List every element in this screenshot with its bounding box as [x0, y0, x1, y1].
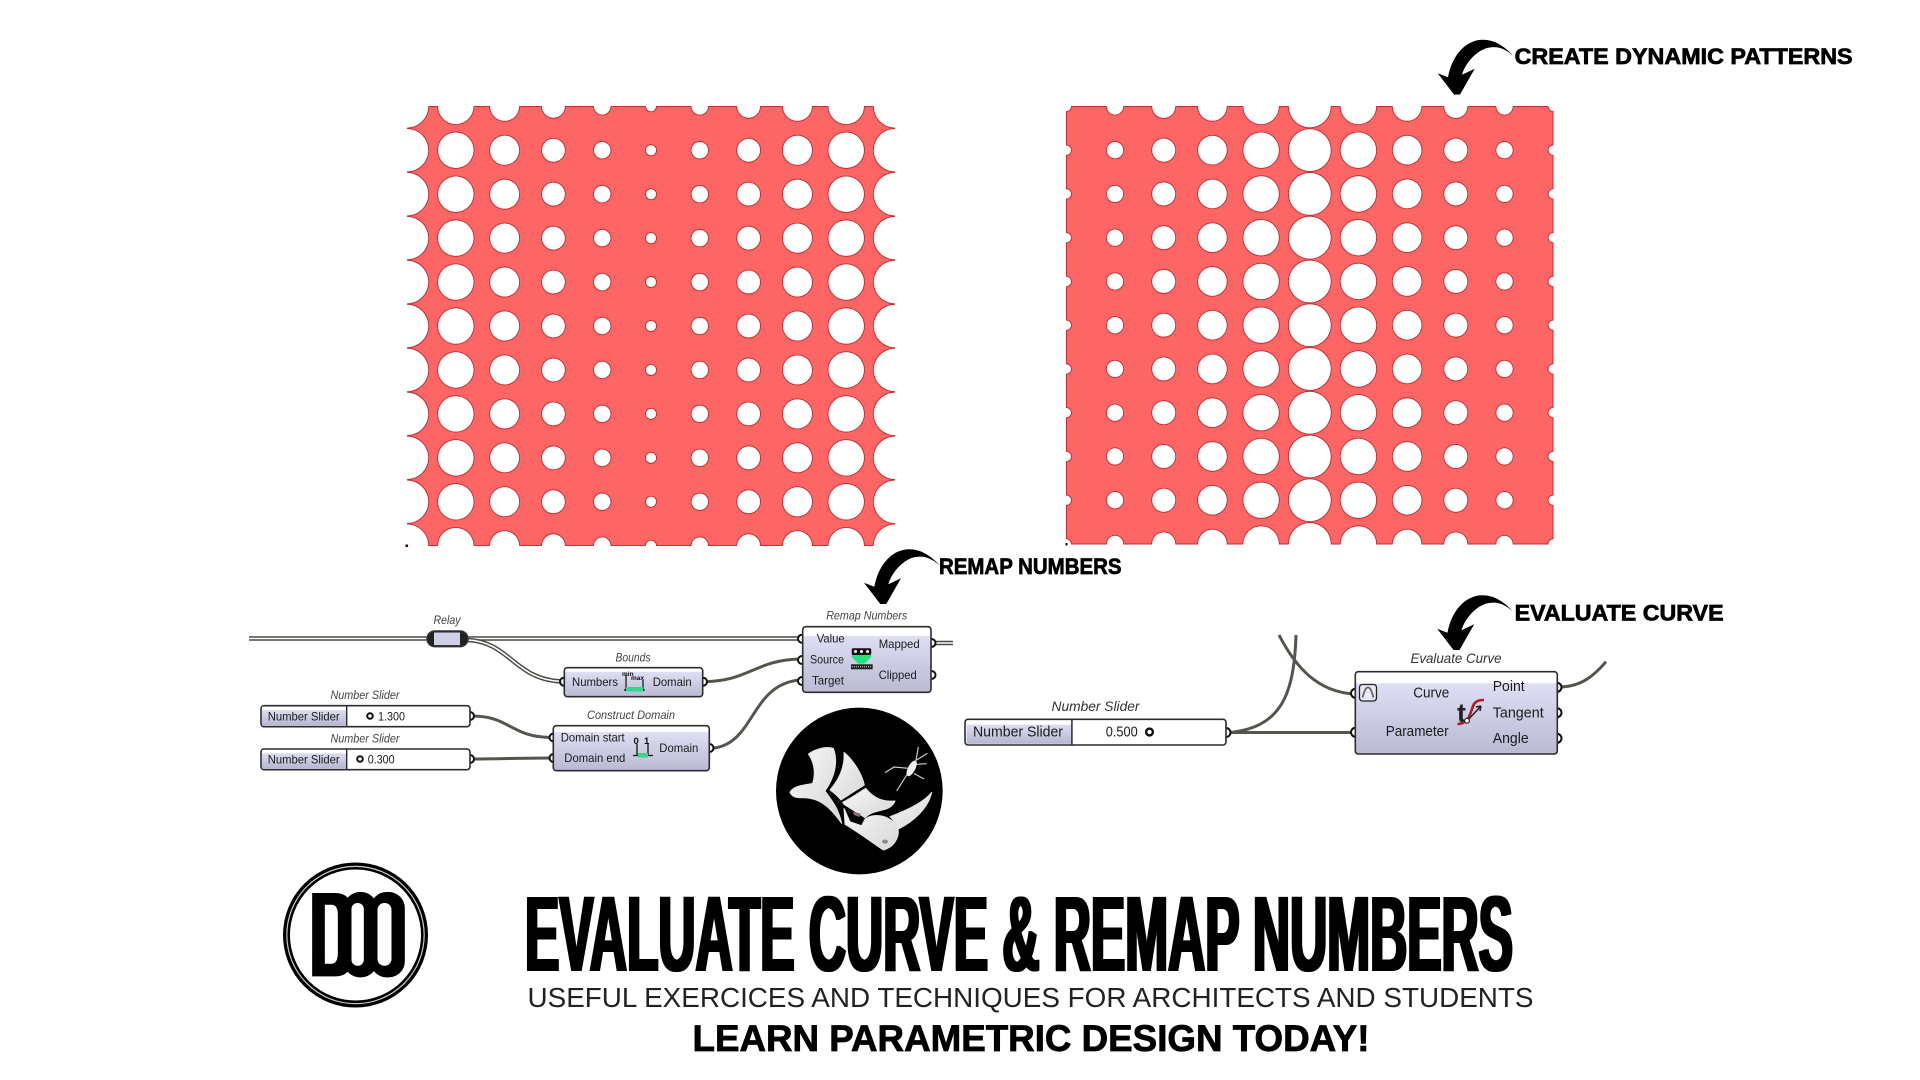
callout: create dynamic patterns: CREATE DYNAMIC PATTERNS — [1515, 44, 1853, 69]
node: relay: Relay — [434, 615, 462, 627]
subtitle: USEFUL EXERCICES AND TECHNIQUES FOR ARCHITECTS AND STUDENTS — [528, 982, 1534, 1013]
node: remap numbers: Mapped — [879, 637, 920, 651]
node: evaluate curve: Evaluate Curve — [1410, 650, 1502, 666]
node: remap numbers: Remap Numbers — [826, 610, 907, 622]
node: evaluate curve: Curve — [1413, 686, 1449, 702]
icon: evaluate — [1457, 698, 1484, 728]
diagram: evaluate curve definition — [965, 635, 1606, 754]
icon: grasshopper — [885, 747, 927, 791]
node: bounds: Bounds — [616, 652, 651, 664]
ports — [466, 635, 936, 763]
panel: remapped pattern, large centre holes — [1066, 106, 1553, 546]
logo: rhino and grasshopper — [776, 708, 943, 874]
ports — [1222, 683, 1562, 743]
node: number slider 0.300: Number Slider — [330, 734, 401, 746]
node: remap numbers: Clipped — [879, 668, 917, 682]
node: number slider 0.500: 0.500 — [1106, 724, 1138, 740]
node: number slider 0.500 — [965, 698, 1226, 745]
logo: DOO circle — [286, 866, 424, 1004]
icon: curve parameter — [1360, 684, 1376, 701]
wires — [1228, 635, 1606, 733]
node: number slider 1.300 — [261, 690, 470, 727]
node: construct domain: Construct Domain — [587, 710, 675, 722]
node: relay — [427, 615, 468, 647]
node: construct domain — [553, 710, 709, 771]
arrow: create dynamic patterns — [1438, 40, 1513, 94]
node: construct domain: Domain end — [564, 751, 625, 765]
arrow: evaluate curve — [1437, 595, 1512, 650]
node: number slider 1.300: Number Slider — [330, 690, 401, 702]
node: evaluate curve — [1355, 650, 1557, 754]
node: number slider 1.300: Number Slider — [268, 710, 340, 724]
node: construct domain: Domain start — [561, 730, 625, 744]
icon: bounds — [622, 671, 645, 692]
node: bounds: Domain — [653, 675, 692, 689]
node: remap numbers — [803, 610, 931, 692]
node: evaluate curve: Tangent — [1493, 706, 1544, 722]
node: construct domain: Domain — [659, 741, 698, 755]
icon: bounds: min — [622, 671, 634, 678]
wires — [249, 638, 953, 759]
node: number slider 0.500: Number Slider — [1052, 698, 1141, 714]
tagline: LEARN PARAMETRIC DESIGN TODAY! — [692, 1018, 1370, 1059]
node: bounds: Numbers — [572, 675, 618, 689]
node: remap numbers: Target — [812, 674, 845, 688]
node: evaluate curve: Parameter — [1386, 724, 1449, 740]
icon: construct domain — [633, 736, 653, 758]
node: bounds — [564, 652, 703, 697]
node: evaluate curve: Point — [1493, 679, 1525, 695]
node: remap numbers: Value — [817, 632, 845, 646]
node: number slider 0.300 — [261, 734, 470, 770]
callout: remap numbers: REMAP NUMBERS — [939, 554, 1122, 579]
callout: evaluate curve: EVALUATE CURVE — [1515, 600, 1724, 626]
arrow: remap numbers — [864, 549, 939, 604]
node: number slider 0.300: Number Slider — [268, 752, 340, 766]
node: remap numbers: Source — [810, 652, 844, 666]
node: number slider 0.500: Number Slider — [973, 724, 1063, 740]
node: number slider 1.300: 1.300 — [378, 710, 405, 724]
icon: construct domain: 1 — [644, 736, 650, 747]
panel: remapped pattern, small centre holes — [406, 106, 895, 547]
diagram: remap numbers definition — [249, 610, 953, 771]
icon: evaluate: t — [1457, 698, 1466, 728]
node: number slider 0.300: 0.300 — [368, 752, 395, 766]
icon: remap — [851, 648, 873, 669]
icon: bounds: max — [631, 675, 644, 682]
node: evaluate curve: Angle — [1493, 731, 1529, 747]
icon: construct domain: 0 — [634, 736, 639, 747]
